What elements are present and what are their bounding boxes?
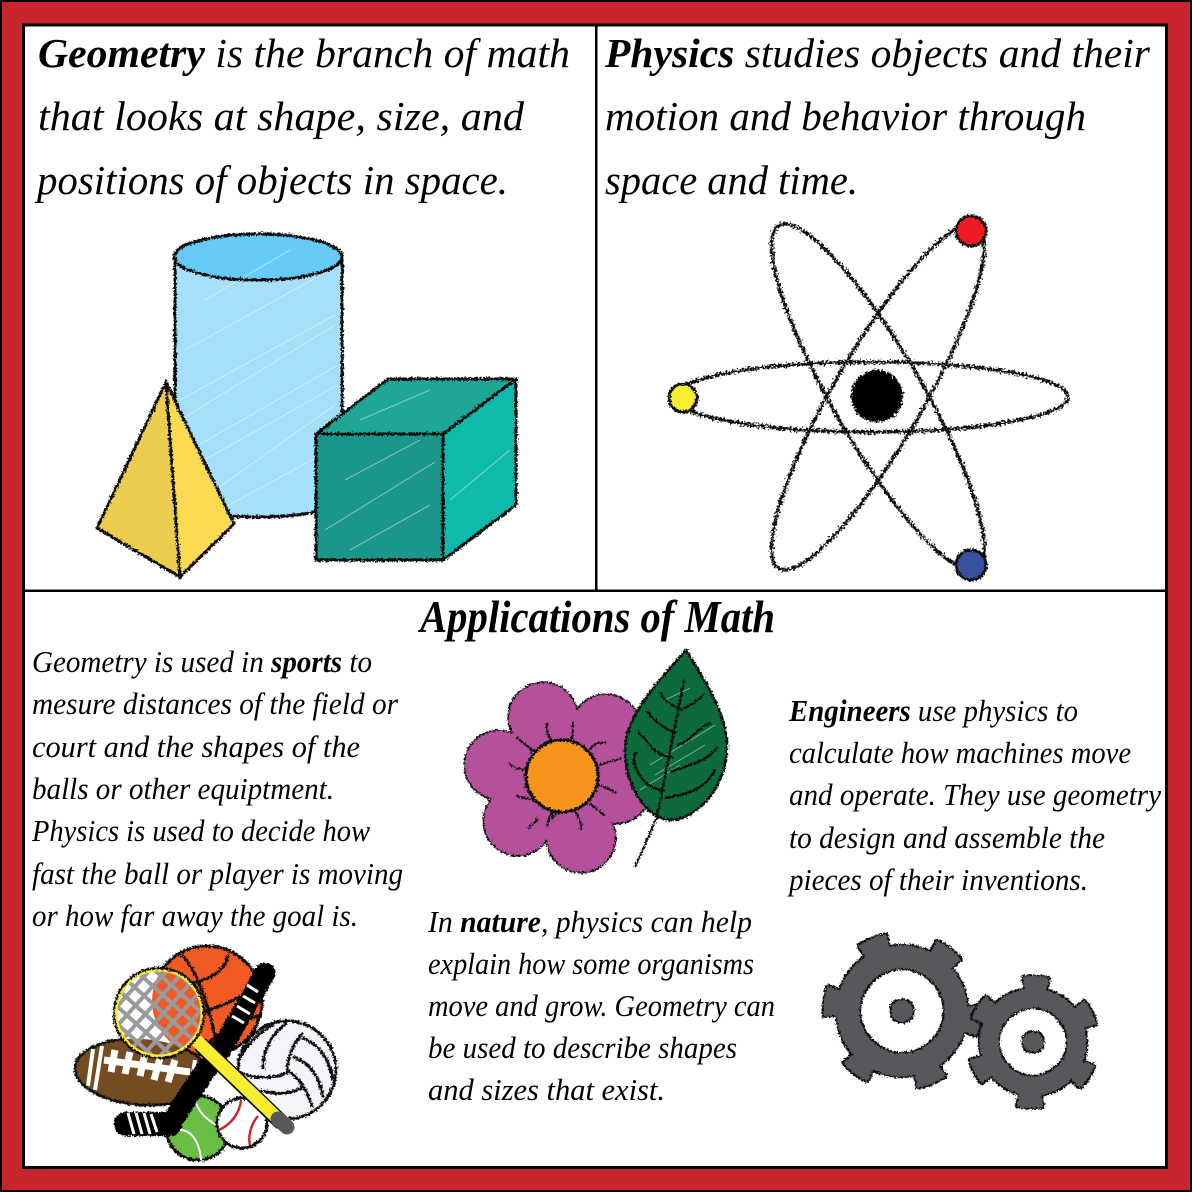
divider: vertical	[595, 25, 598, 590]
leaf veins	[634, 680, 717, 867]
small gear	[957, 966, 1109, 1118]
racket head	[112, 966, 206, 1060]
petal creases	[509, 722, 622, 830]
panel: physics	[598, 27, 1165, 591]
text: sports	[31, 644, 403, 933]
electron: yellow	[669, 384, 697, 412]
text: sports: fast the ball or player is moving	[32, 856, 403, 891]
heading: applications of math: Applications of Math	[417, 591, 775, 642]
text: engineers: Engineers use physics to	[788, 693, 1078, 728]
physics definition text	[604, 30, 1151, 203]
geometry definition text: Geometry is the branch of math	[38, 30, 570, 76]
text: nature: In nature, physics can help	[427, 904, 752, 939]
flower centre	[526, 740, 598, 812]
basketball	[152, 946, 262, 1056]
text: engineers: pieces of their inventions.	[787, 862, 1088, 897]
flower petals	[465, 683, 651, 872]
text: engineers: and operate. They use geometry	[789, 777, 1161, 812]
text: nature: move and grow. Geometry can	[428, 988, 775, 1023]
icon: atom	[669, 203, 1068, 591]
icon: flower	[465, 683, 651, 872]
text: nature: and sizes that exist.	[428, 1072, 665, 1107]
electron: blue	[956, 550, 986, 580]
icon: sports equipment	[73, 946, 336, 1160]
text: sports: balls or other equiptment.	[32, 771, 334, 806]
icon: cylinder	[174, 234, 342, 517]
racket handle	[200, 1044, 282, 1123]
geometry definition text	[34, 30, 570, 203]
volleyball	[238, 1021, 336, 1119]
icon: pyramid	[97, 382, 234, 577]
large gear	[826, 935, 978, 1087]
text: sports: mesure distances of the field or	[32, 686, 399, 721]
panel: geometry	[25, 27, 595, 589]
icon: gears	[826, 935, 1109, 1118]
hockey stick	[126, 973, 265, 1134]
geometry definition text: that looks at shape, size, and	[38, 93, 525, 139]
baseball	[217, 1098, 267, 1148]
icon: cube	[316, 379, 516, 560]
text: engineers	[787, 693, 1161, 897]
geometry definition text: positions of objects in space.	[34, 157, 508, 203]
text: sports: Geometry is used in sports to	[32, 644, 372, 679]
tennis ball	[166, 1096, 230, 1160]
physics definition text: motion and behavior through	[605, 93, 1086, 139]
atom nucleus	[851, 370, 903, 422]
panel: applications of math	[25, 591, 1165, 1166]
icon: leaf	[625, 650, 727, 867]
text: nature: explain how some organisms	[428, 946, 754, 981]
football	[73, 1034, 211, 1110]
atom orbits	[674, 203, 1068, 591]
physics definition text: space and time.	[605, 157, 858, 203]
text: engineers: calculate how machines move	[789, 735, 1131, 770]
divider: horizontal	[23, 590, 1166, 592]
text: engineers: to design and assemble the	[789, 820, 1105, 855]
text: sports: court and the shapes of the	[32, 729, 360, 764]
text: nature	[427, 904, 775, 1107]
text: sports: or how far away the goal is.	[32, 898, 358, 933]
racket	[112, 966, 294, 1134]
physics definition text: Physics studies objects and their	[604, 30, 1151, 76]
text: sports: Physics is used to decide how	[31, 813, 370, 848]
text: nature: be used to describe shapes	[428, 1030, 737, 1065]
electron: red	[956, 216, 986, 246]
